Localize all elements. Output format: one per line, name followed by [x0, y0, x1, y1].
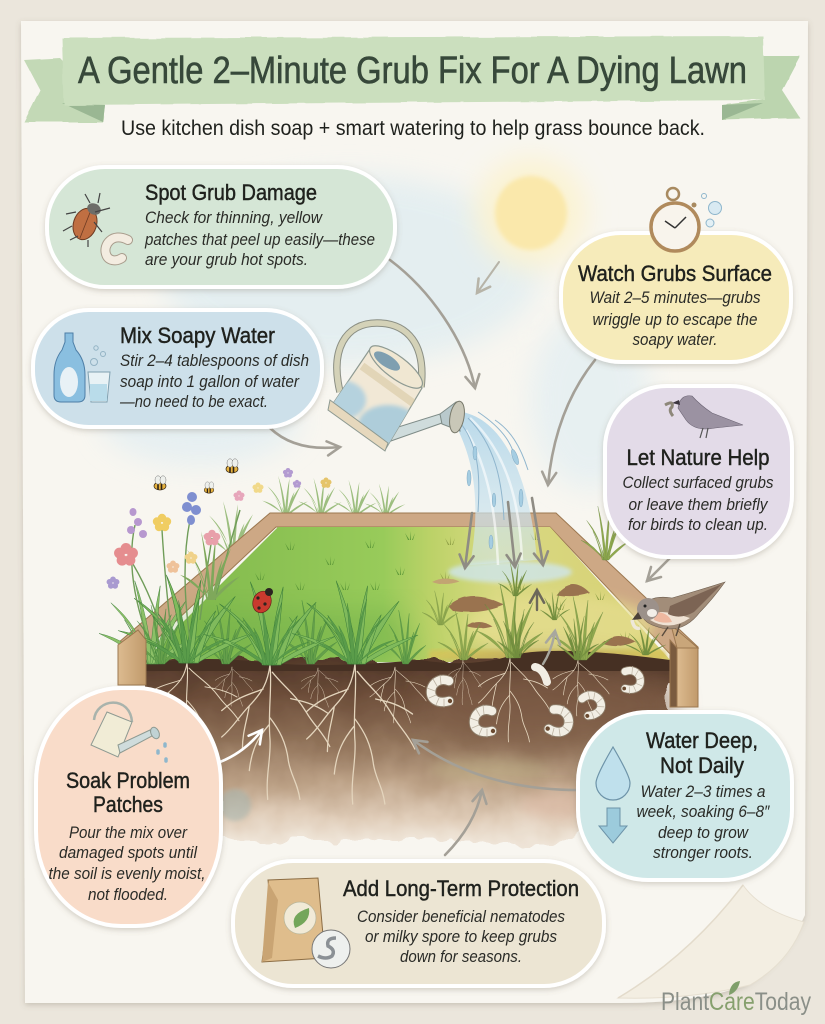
dirt mounds [432, 578, 636, 647]
arrow: soap mix to can [270, 428, 340, 448]
panel text: Spot Grub Damage [145, 180, 317, 205]
grubs in soil [427, 666, 644, 740]
icon: stopwatch [651, 188, 722, 251]
title banner [24, 36, 800, 122]
watering can [314, 323, 467, 451]
panel: mix soapy water [33, 310, 322, 427]
subtitle: Use kitchen dish soap + smart watering to help grass bounce back. [121, 116, 705, 140]
arrow: from sun [477, 262, 499, 293]
bees [154, 459, 238, 493]
panel text: Stir 2–4 tablespoons of dish [120, 351, 309, 370]
arrow: grubs surface to lawn [548, 360, 595, 485]
panel text: Check for thinning, yellow [145, 208, 324, 227]
panel: watch grubs surface [561, 188, 791, 362]
panel: let nature help [605, 386, 792, 557]
panel text: Not Daily [660, 753, 744, 778]
banner main strip [62, 36, 765, 105]
panel: soak problem patches [36, 688, 221, 926]
icon: down arrow [599, 808, 627, 843]
panel text: Soak Problem [66, 768, 190, 793]
sun [476, 158, 586, 268]
icon: beetle and grub [63, 193, 128, 260]
panel text: or milky spore to keep grubs [365, 927, 557, 946]
panel text [578, 261, 772, 349]
icon: dish soap and glass [54, 333, 110, 402]
lawn surface [143, 527, 672, 662]
panel text [343, 876, 579, 966]
icon: water drop [596, 747, 630, 800]
panel text: Let Nature Help [626, 445, 770, 470]
panel text: Wait 2–5 minutes—grubs [590, 288, 761, 307]
panel text [144, 180, 375, 269]
arrow: protection to soil [445, 790, 482, 855]
panel text [48, 768, 206, 904]
panel text [622, 445, 774, 534]
panel text: wriggle up to escape the [592, 310, 758, 329]
panel: spot grub damage [47, 167, 395, 287]
flow arrows [220, 260, 670, 855]
arrow: soak to roots [220, 730, 262, 762]
soil cross-section [143, 651, 675, 842]
panel text: stronger roots. [653, 843, 753, 862]
wildflowers [107, 468, 332, 640]
panel text: down for seasons. [400, 947, 522, 966]
banner left ribbon tail [24, 58, 105, 122]
panel text: Add Long-Term Protection [343, 876, 579, 901]
panel text: Watch Grubs Surface [578, 261, 772, 286]
arrow: water deep to soil [413, 740, 578, 790]
panel text: soap into 1 gallon of water [120, 372, 300, 391]
raised garden bed illustration [99, 459, 698, 842]
water puddle [448, 561, 572, 583]
panel text: Mix Soapy Water [120, 323, 275, 348]
ladybug [250, 588, 274, 615]
background flowers and grass behind bed [202, 476, 405, 555]
water stream [459, 412, 537, 565]
panel text: Water Deep, [646, 728, 758, 753]
panel text: Patches [93, 792, 163, 817]
healthy grass clumps [99, 575, 426, 665]
panel: water deep not daily [578, 712, 792, 880]
bed back and side boards [118, 513, 698, 656]
arrow: spot damage to lawn [390, 260, 475, 388]
panel text: the soil is evenly moist, [48, 864, 206, 883]
panel text: are your grub hot spots. [145, 250, 308, 269]
arrows: water soaking into soil [465, 498, 543, 568]
banner folds [62, 103, 763, 122]
icon: small watering can [91, 703, 166, 761]
sky watercolor wash [100, 175, 650, 490]
panel text: —no need to be exact. [119, 392, 268, 411]
panel text: or leave them briefly [628, 495, 769, 514]
panel text [636, 728, 770, 862]
panel text: for birds to clean up. [628, 515, 768, 534]
panel text: week, soaking 6–8″ [636, 802, 770, 821]
icon: seed bag and nematode disc [262, 878, 350, 968]
panel text: Water 2–3 times a [640, 782, 766, 801]
logo: PlantCareToday: PlantCareToday [661, 988, 811, 1016]
bird eating grub [632, 582, 725, 636]
roots [145, 658, 609, 804]
panel text: Consider beneficial nematodes [357, 907, 565, 926]
panel text: patches that peel up easily—these [144, 230, 375, 249]
upward grub arrows [537, 590, 555, 664]
damaged grass clumps [422, 506, 666, 660]
panel: add long-term protection [233, 861, 604, 986]
arrow: nature to bird [647, 558, 670, 581]
lawn tufts and yellow patches [150, 531, 668, 662]
panel text: soapy water. [632, 330, 718, 349]
panel text: Collect surfaced grubs [622, 473, 774, 492]
icon: bird with grub [665, 396, 743, 438]
panel text [119, 323, 309, 411]
bed front corner posts [118, 625, 698, 707]
panel text: deep to grow [658, 823, 750, 842]
panel text: Pour the mix over [69, 823, 188, 842]
panel text: not flooded. [88, 885, 168, 904]
panel text: damaged spots until [59, 843, 198, 862]
banner right ribbon tail [722, 56, 800, 120]
